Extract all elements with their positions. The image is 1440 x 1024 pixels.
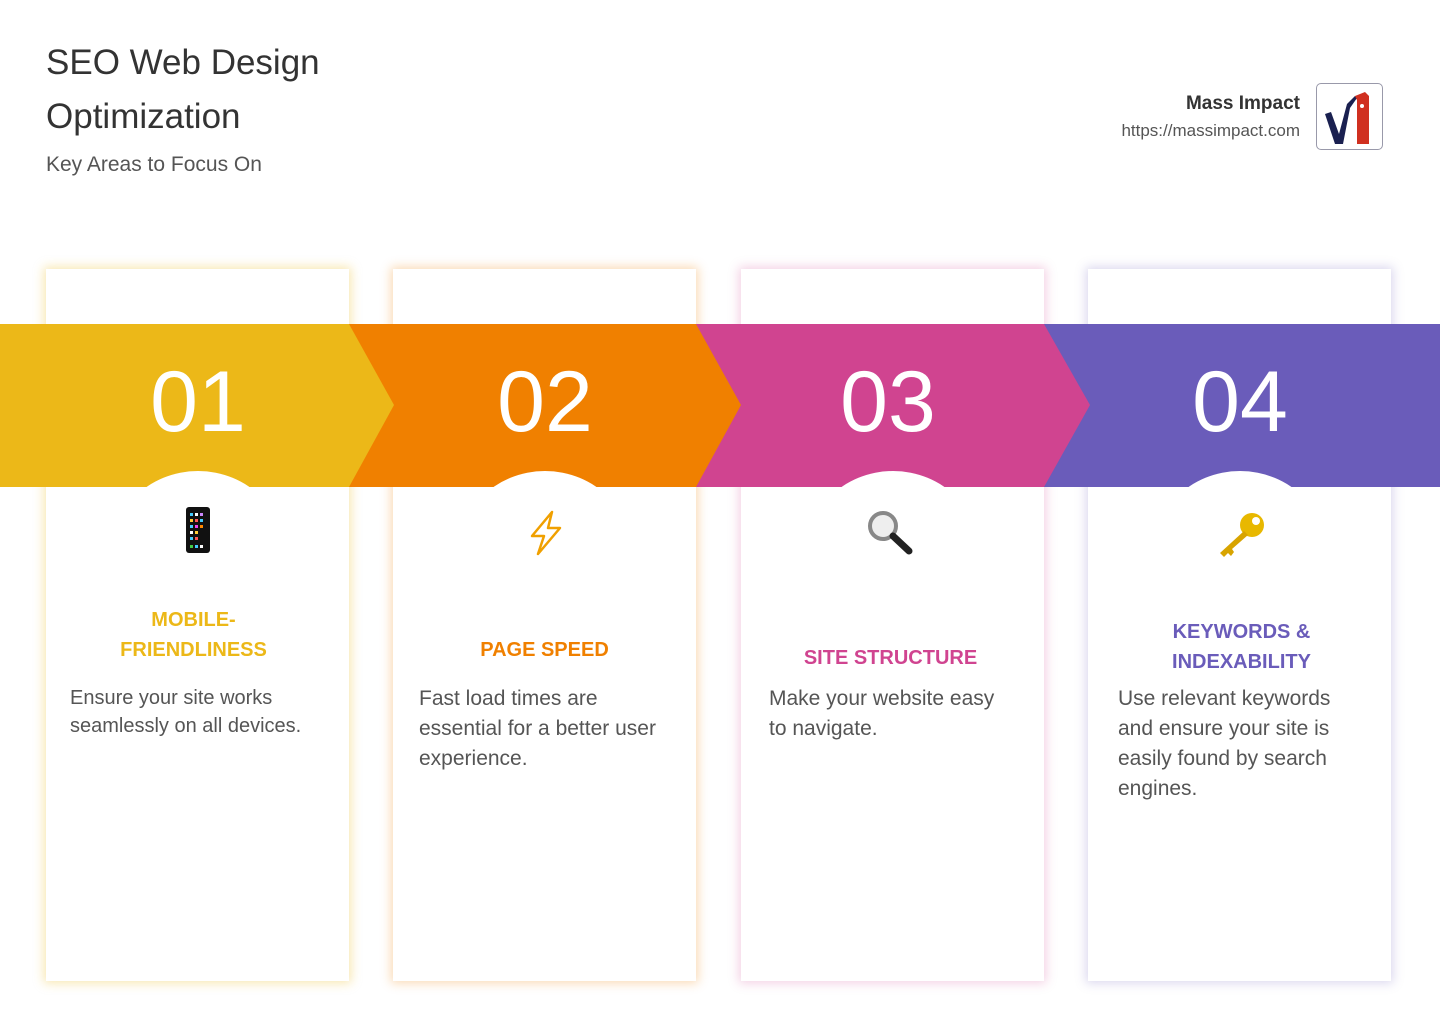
- text: seamlessly on all devices.: [70, 715, 301, 737]
- card 1 text: [120, 609, 267, 661]
- text: Fast load times are: [419, 687, 598, 710]
- subtitle: Key Areas to Focus On: [46, 153, 262, 176]
- icon: magnifier: [868, 511, 912, 554]
- brand: [1121, 93, 1300, 140]
- brand: https://massimpact.com: [1121, 121, 1300, 140]
- card 2 text: PAGE SPEED: [480, 639, 609, 661]
- card 3 text: SITE STRUCTURE: [804, 647, 977, 669]
- text: engines.: [1118, 777, 1197, 800]
- text: Ensure your site works: [70, 687, 272, 709]
- text: easily found by search: [1118, 747, 1327, 770]
- title: [46, 43, 320, 136]
- card 4 text: KEYWORDS &: [1173, 621, 1310, 643]
- circles: [107, 471, 289, 653]
- card 1 text: FRIENDLINESS: [120, 639, 267, 661]
- card 4 text: [1172, 621, 1311, 673]
- title: SEO Web Design: [46, 43, 320, 82]
- icon: key: [1220, 513, 1264, 557]
- text: to navigate.: [769, 717, 878, 740]
- title: Optimization: [46, 97, 241, 136]
- text: Use relevant keywords: [1118, 687, 1330, 710]
- brand: Mass Impact: [1186, 93, 1300, 114]
- card 4 text: INDEXABILITY: [1172, 651, 1311, 673]
- text: experience.: [419, 747, 528, 770]
- text: essential for a better user: [419, 717, 656, 740]
- text: and ensure your site is: [1118, 717, 1329, 740]
- numbers: 01: [150, 354, 246, 450]
- icon: phone: [186, 507, 210, 553]
- text: 02: [497, 354, 593, 450]
- text: 04: [1192, 354, 1288, 450]
- icon: lightning: [530, 510, 562, 556]
- text: 03: [840, 354, 936, 450]
- logo: [1316, 83, 1383, 150]
- cards: [46, 269, 349, 981]
- card 1 text: MOBILE-: [151, 609, 236, 631]
- banner: [0, 324, 1440, 487]
- text: Make your website easy: [769, 687, 994, 710]
